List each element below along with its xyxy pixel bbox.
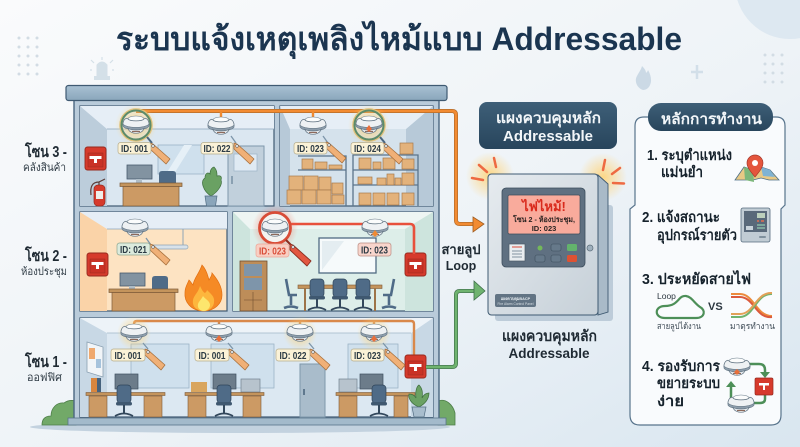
detector zone 3: ID 022: ID: 022: [204, 144, 231, 155]
alarm rays: [472, 158, 624, 184]
control panel caption: แผงควบคุมหลัก: [502, 328, 597, 346]
heading: main control panel: [479, 102, 617, 149]
bush left: [42, 400, 76, 425]
icon: loop diagram: Loop: [657, 291, 676, 301]
room: zone 1: [80, 318, 433, 417]
control panel caption: Addressable: [508, 346, 590, 361]
red panel zone 1: [405, 355, 426, 378]
ceiling lamp: [150, 229, 188, 249]
item 4: [642, 358, 773, 412]
item 4: ขยายระบบ: [657, 376, 720, 392]
conference table: [284, 279, 396, 311]
item 1: แม่นยำ: [661, 164, 703, 181]
detector zone 1: ID 022: [276, 316, 330, 370]
item 2: [642, 208, 770, 244]
heading: main control panel: Addressable: [503, 128, 593, 145]
plant: [203, 167, 221, 206]
screen text: ID: 023: [532, 224, 556, 233]
base slab: [68, 418, 446, 425]
decorative corner circle: [735, 0, 800, 39]
zone label 3: คลังสินค้า: [23, 162, 66, 174]
arrow: green loop into panel: [426, 281, 485, 367]
detector zone 3: ID 022: [201, 117, 254, 164]
detector zone 1: ID 001 second: ID: 001: [198, 351, 226, 362]
detector zone 2: alarm ID 023: [252, 205, 311, 266]
item 4: ง่าย: [657, 394, 684, 410]
item 2: 2. แจ้งสถานะ: [642, 209, 720, 226]
zone label 1: โซน 1 -: [24, 351, 67, 371]
zone label 2: ห้องประชุม: [21, 266, 67, 278]
icon: panel: [741, 208, 770, 242]
red panel: [87, 253, 108, 276]
detector zone 2: ID 021: [117, 219, 170, 265]
icon: alarm beacon: [90, 57, 114, 80]
icon: plus: [691, 65, 703, 79]
detector zone 2: alarm ID 023: ID: 023: [259, 246, 286, 258]
room: zone 3 office: [80, 106, 274, 206]
detector zone 3: ID 001 highlighted: [115, 104, 170, 164]
windows: [131, 344, 398, 388]
brand plate: Fire Alarm Control Panel: [498, 302, 534, 306]
loop label: สายลูป: [441, 242, 481, 258]
cabinet side: [598, 175, 608, 315]
desk: [120, 165, 182, 206]
detector zone 1: ID 023: ID: 023: [354, 351, 381, 362]
detector warehouse: ID 024 highlighted: [348, 104, 403, 164]
panel heading: [648, 103, 773, 131]
detector zone 2: ID 023: [358, 219, 391, 256]
title: ระบบแจ้งเหตุเพลิงไหม้แบบ Addressable: [116, 20, 682, 60]
red panel: [85, 147, 106, 170]
zone label 2: [21, 245, 67, 278]
room: zone 2 right: [233, 212, 433, 311]
alarm glows: [466, 152, 514, 200]
roof: [66, 86, 447, 100]
key lock: [587, 245, 593, 251]
arrow: orange loop into panel: [473, 217, 484, 232]
detector zone 2: ID 023: ID: 023: [361, 246, 388, 256]
bookshelf: [240, 261, 267, 311]
panel heading: หลักการทำงาน: [661, 111, 763, 128]
building walls: [74, 98, 439, 420]
item 3: [642, 269, 775, 332]
red wire: zone 2: [290, 224, 414, 254]
icon: expansion cycle: [724, 358, 773, 412]
item 4: 4. รองรับการ: [642, 359, 720, 375]
caption left: สายลูปได้งาน: [657, 321, 701, 332]
plant: [409, 385, 429, 417]
detector zone 1: ID 001 second: [195, 324, 249, 370]
caption right: มาตุรทำงาน: [730, 321, 775, 332]
brand plate: [495, 294, 536, 307]
extinguisher: [91, 179, 105, 206]
zone label 2: โซน 2 -: [24, 245, 67, 265]
desk: [109, 273, 178, 311]
cabinet: [488, 174, 598, 315]
room: zone 2 left: [80, 212, 227, 311]
screen text: [512, 198, 575, 233]
item 1: 1. ระบุตำแหน่ง: [647, 147, 732, 164]
detector zone 1: ID 001: ID: 001: [114, 351, 142, 362]
vs: VS: [708, 301, 723, 313]
door: [228, 146, 264, 206]
zone label 3: โซน 3 -: [24, 141, 67, 161]
detector zone 1: ID 001: [111, 316, 165, 370]
detector zone 2: ID 021: ID: 021: [120, 245, 147, 256]
shadow: [495, 205, 613, 321]
item 3: 3. ประหยัดสายไฟ: [642, 269, 751, 288]
desks: [86, 374, 415, 417]
detector warehouse: ID 023: ID: 023: [297, 144, 324, 155]
fire: [185, 265, 222, 311]
control keys: [509, 244, 577, 262]
wire: zone 1: [134, 321, 414, 356]
detector zone 3: ID 001 highlighted: ID: 001: [121, 144, 148, 155]
control panel caption: [502, 328, 597, 361]
loop wire: zone 3: [136, 111, 474, 224]
loop label: [441, 242, 481, 273]
item 1: [647, 147, 779, 182]
panel: working principles: [630, 103, 785, 425]
red panel: [405, 253, 426, 276]
detector warehouse: ID 023: [294, 117, 346, 163]
door: [300, 364, 325, 417]
brand plate: แผงควบคุมBACP: [501, 296, 531, 302]
shelves: [298, 155, 418, 206]
loop label: Loop: [446, 259, 477, 273]
boxes: [287, 143, 414, 205]
detector warehouse: ID 024 highlighted: ID: 024: [354, 144, 381, 155]
zone label 1: [24, 351, 67, 384]
screen: [508, 195, 580, 234]
item 2: อุปกรณ์รายตัว: [657, 226, 737, 244]
decorative dots right: [764, 54, 784, 84]
zone label 3: [23, 141, 67, 174]
ground shadow: [30, 421, 450, 433]
icon: tangled wires: [731, 293, 772, 317]
whiteboard: [319, 238, 376, 273]
detector zone 1: ID 023: [351, 316, 405, 370]
zone label 1: ออฟฟิศ: [27, 372, 62, 384]
screen text: โซน 2 - ห้องประชุม,: [512, 214, 575, 224]
detector zone 1: ID 022: ID: 022: [280, 351, 307, 362]
screen text: ไฟไหม้!: [520, 198, 566, 214]
icon: flame: [636, 66, 651, 90]
icon: map pin: [735, 155, 779, 182]
room: zone 3 warehouse: [280, 106, 433, 206]
heading: main control panel: แผงควบคุมหลัก: [496, 110, 601, 128]
control panel device: [466, 152, 627, 321]
building: [66, 86, 474, 425]
bezel: [502, 188, 585, 267]
poster: [87, 342, 103, 377]
bush right: [438, 400, 455, 425]
wire drop to detector: [221, 111, 313, 119]
window: [158, 145, 204, 174]
decorative dots left: [18, 36, 38, 76]
